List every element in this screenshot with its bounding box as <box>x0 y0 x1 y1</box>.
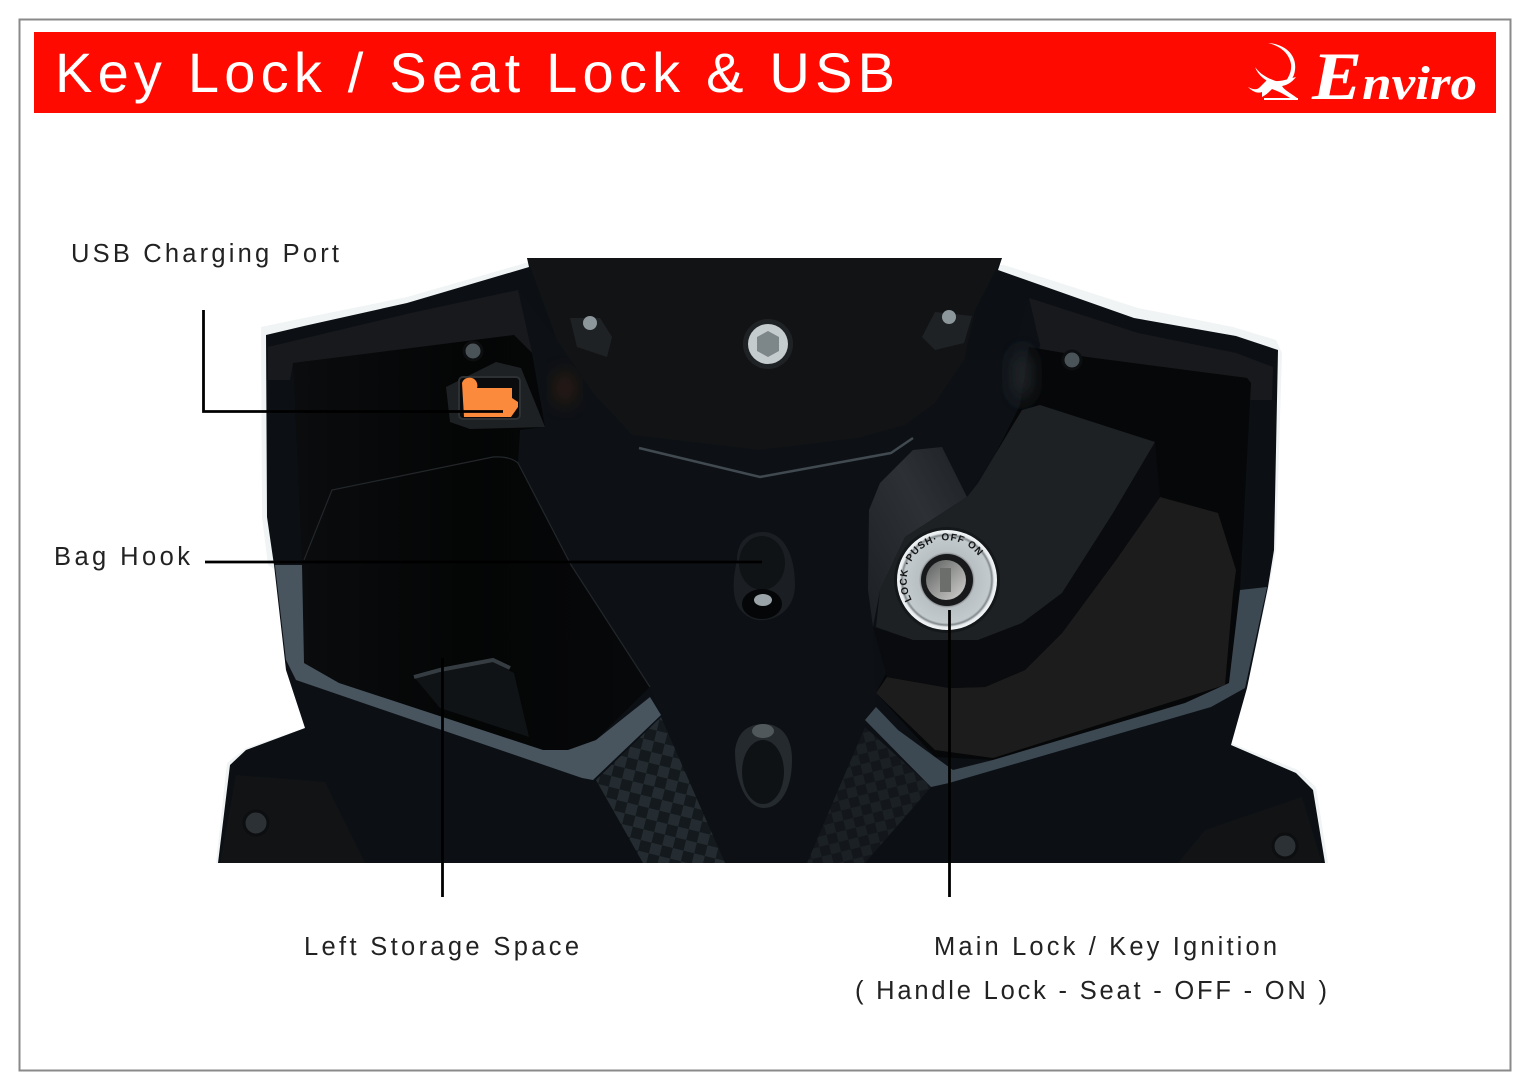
leader line: Main Lock <box>948 610 951 897</box>
cap highlight edge <box>639 438 913 477</box>
left storage step <box>414 662 529 737</box>
right storage well <box>876 347 1251 760</box>
hump lower shadow <box>873 442 1160 688</box>
usb housing <box>446 362 545 429</box>
callout: Main Lock: Main Lock / Key Ignition <box>934 933 1277 961</box>
callout: Bag Hook: Bag Hook <box>54 543 190 571</box>
hump textured top <box>876 405 1155 640</box>
lower left rim <box>275 565 661 780</box>
callout: USB Charging Port <box>71 240 503 412</box>
lock ring markings: LOCK ·PUSH· OFF ON <box>900 533 984 602</box>
title banner <box>34 32 1496 113</box>
top dashboard cap <box>527 258 1002 450</box>
leader line: Left Storage <box>441 658 444 897</box>
main body <box>218 258 1325 863</box>
logo: Enviro <box>1248 38 1477 114</box>
white fairing trim <box>216 262 1328 863</box>
lower left panel <box>220 775 365 863</box>
lower right rim <box>865 587 1267 787</box>
title: Key Lock / Seat Lock & USB <box>55 41 895 104</box>
centre spine <box>518 290 1040 863</box>
leader line: Bag Hook <box>205 561 762 563</box>
orange reflection <box>556 372 574 404</box>
lower slot <box>735 724 792 808</box>
icon: running figure <box>1248 43 1298 100</box>
bracket screws <box>583 310 956 330</box>
upper ledge left <box>268 290 557 380</box>
hump glossy side <box>868 447 967 627</box>
textured floor mat <box>876 497 1236 758</box>
callout: Left Storage Space: Left Storage Space <box>304 933 579 961</box>
scooter photo illustration <box>216 258 1328 863</box>
bag hook <box>734 532 795 620</box>
screw brackets <box>570 312 972 357</box>
lock ring <box>894 527 1000 633</box>
brand name: Enviro <box>1311 38 1477 114</box>
callout: USB Charging Port: USB Charging Port <box>71 240 339 268</box>
left storage well <box>293 335 650 750</box>
carbon panel left <box>596 717 725 863</box>
screws <box>244 342 1297 858</box>
leader line: USB <box>204 310 503 412</box>
storage shelf outline <box>304 457 650 687</box>
callout: Main Lock <box>855 610 1327 1005</box>
lower right panel <box>1178 797 1322 863</box>
soft highlight beside hump <box>1012 347 1032 403</box>
upper ledge right <box>1011 298 1273 400</box>
centre bolt <box>743 319 793 369</box>
carbon panel right <box>807 727 931 863</box>
callout: Main Lock: ( Handle Lock - Seat - OFF - ON ) <box>855 977 1327 1005</box>
usb orange cap <box>462 378 518 417</box>
